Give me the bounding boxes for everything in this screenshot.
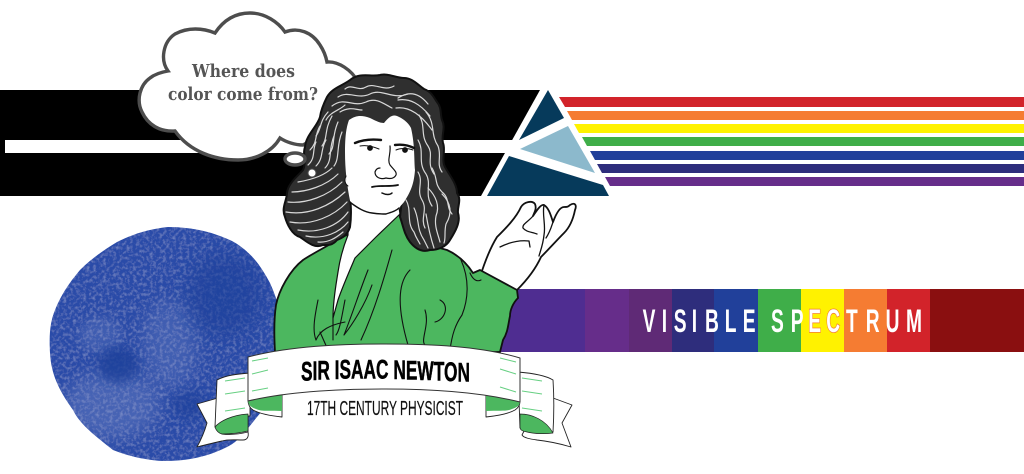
eyebrows, eyes, nose, mouth	[355, 140, 414, 194]
hair	[284, 75, 459, 251]
ribbon folds	[248, 392, 520, 417]
ribbon tier left	[215, 373, 250, 434]
spectrum bar	[500, 289, 1024, 352]
Newton illustration	[274, 75, 576, 352]
watercolor blue circle	[50, 227, 276, 461]
subtitle text: 17TH CENTURY PHYSICIST	[307, 397, 463, 420]
thought bubble text: color come from?	[168, 84, 318, 105]
spectrum label	[643, 303, 922, 339]
thought bubble	[139, 13, 358, 160]
ribbon tail left	[197, 398, 248, 447]
spectrum label: VISIBLE SP	[643, 303, 804, 339]
face	[345, 115, 415, 214]
thought bubble text	[168, 61, 318, 105]
hand	[480, 202, 576, 290]
refracted rainbow stripes	[559, 97, 1024, 186]
black light beam	[0, 90, 540, 196]
ribbon tier right	[518, 372, 554, 434]
thought bubble text: Where does	[191, 61, 295, 82]
name text: SIR ISAAC NEWTON	[301, 354, 470, 387]
prism	[487, 90, 609, 196]
thought bubble trailing dots	[285, 153, 316, 177]
ribbon tail right	[522, 398, 572, 447]
green robe	[274, 212, 518, 352]
hair strands	[286, 86, 452, 248]
spectrum label: EC	[808, 303, 840, 339]
ribbon banner	[197, 344, 572, 447]
neck and shirt	[333, 200, 400, 318]
spectrum label: TRUM	[846, 303, 922, 339]
ribbon hatch marks	[225, 358, 542, 411]
ribbon main band	[248, 344, 520, 402]
